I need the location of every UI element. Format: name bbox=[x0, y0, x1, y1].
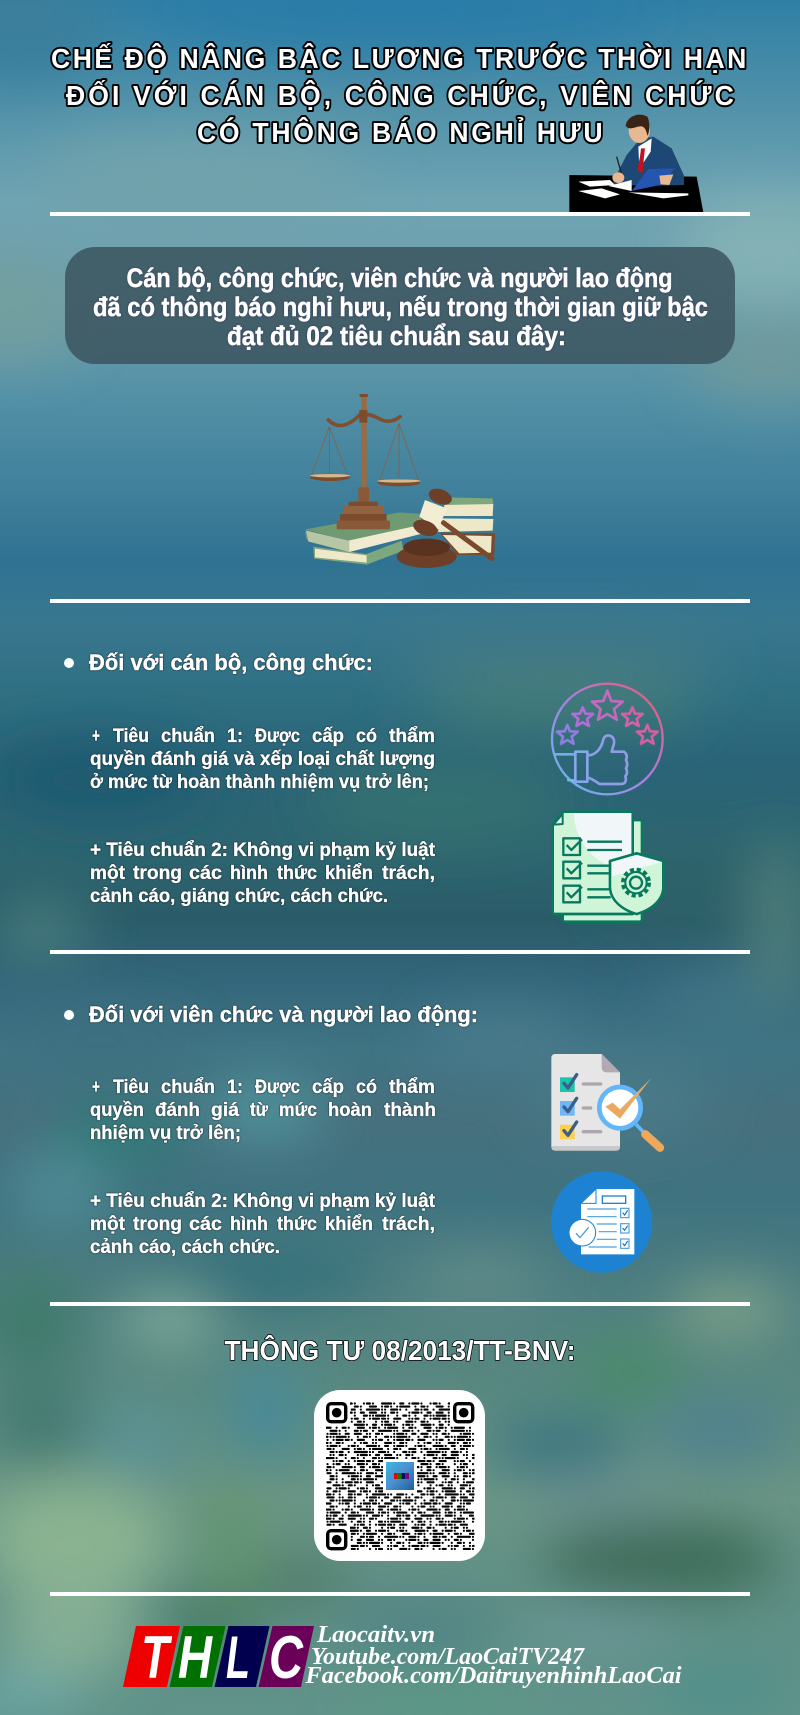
icon: checklist document with gear shield bbox=[553, 812, 663, 922]
panel: intro callout: Cán bộ, công chức, viên chức và người lao động bbox=[126, 263, 672, 293]
criterion 1 bbox=[90, 1077, 436, 1144]
title bbox=[51, 41, 746, 148]
criterion 2: cảnh cáo, giáng chức, cách chức. bbox=[90, 886, 388, 907]
divider 1 bbox=[50, 212, 750, 216]
QR finder patterns bbox=[328, 1404, 473, 1549]
icon: checklist with magnifier bbox=[551, 1054, 660, 1151]
divider 5 bbox=[50, 1592, 750, 1596]
criterion 2: trong bbox=[133, 863, 182, 884]
icon: scales of justice, gavel and books bbox=[305, 394, 495, 568]
channel links: Youtube.com/LaoCaiTV247 bbox=[311, 1644, 585, 1670]
criterion 1: 1: bbox=[227, 726, 243, 747]
logo: THLC: C bbox=[269, 1624, 304, 1691]
criterion 1: cấp bbox=[312, 726, 344, 747]
heading: Đối với cán bộ, công chức: bbox=[89, 650, 373, 675]
logo: THLC: L bbox=[226, 1624, 250, 1691]
criterion 2: cảnh cáo, cách chức. bbox=[90, 1237, 280, 1258]
criterion 2: các bbox=[189, 1214, 222, 1235]
heading: Đối với viên chức và người lao động: bbox=[89, 1002, 478, 1027]
section: officials bbox=[64, 650, 436, 907]
criterion 2 bbox=[90, 840, 436, 907]
criterion 2: hình bbox=[230, 1214, 268, 1235]
criterion 1: cấp bbox=[312, 1077, 344, 1098]
criterion 2: trách, bbox=[382, 863, 435, 884]
heading: circular reference: THÔNG TƯ 08/2013/TT-BNV: bbox=[224, 1334, 576, 1366]
criterion 1: thẩm bbox=[389, 726, 435, 747]
criterion 1: Được bbox=[255, 1077, 300, 1098]
criterion 2: + Tiêu chuẩn 2: Không vi phạm kỷ luật bbox=[90, 840, 436, 861]
logo: THLC: T bbox=[141, 1624, 172, 1691]
criterion 1: mức bbox=[279, 1100, 317, 1121]
criterion 1 bbox=[90, 726, 435, 793]
title: ĐỐI VỚI CÁN BỘ, CÔNG CHỨC, VIÊN CHỨC bbox=[66, 78, 734, 111]
criterion 1: đánh bbox=[155, 1100, 200, 1121]
criterion 2: trách, bbox=[382, 1214, 435, 1235]
section: public employees and workers bbox=[64, 1002, 478, 1258]
criterion 1: + bbox=[92, 726, 100, 747]
criterion 2: khiển bbox=[325, 863, 373, 884]
criterion 1: giá bbox=[211, 1100, 239, 1121]
logo: THLC: H bbox=[178, 1624, 213, 1691]
criterion 1: + bbox=[92, 1077, 100, 1098]
divider 2 bbox=[50, 599, 750, 603]
criterion 1: chuẩn bbox=[161, 726, 215, 747]
criterion 2: khiển bbox=[325, 1214, 373, 1235]
criterion 1: Tiêu bbox=[113, 1077, 149, 1098]
criterion 1: thẩm bbox=[389, 1077, 435, 1098]
criterion 2: thức bbox=[277, 863, 317, 884]
criterion 1: có bbox=[356, 726, 377, 747]
criterion 1: hoàn bbox=[328, 1100, 372, 1121]
criterion 2: thức bbox=[277, 1214, 317, 1235]
criterion 1: Tiêu bbox=[113, 726, 149, 747]
channel links: Facebook.com/DaitruyenhinhLaoCai bbox=[304, 1663, 682, 1689]
channel links bbox=[304, 1622, 682, 1689]
icon: blue circle with document and checkmarks bbox=[551, 1171, 652, 1273]
criterion 2: một bbox=[90, 863, 126, 884]
criterion 2 bbox=[90, 1191, 436, 1258]
criterion 1: chuẩn bbox=[161, 1077, 215, 1098]
title: CHẾ ĐỘ NÂNG BẬC LƯƠNG TRƯỚC THỜI HẠN bbox=[51, 41, 746, 74]
criterion 1: quyền bbox=[90, 1100, 144, 1121]
criterion 1: từ bbox=[250, 1100, 268, 1121]
criterion 2: trong bbox=[133, 1214, 182, 1235]
criterion 2: + Tiêu chuẩn 2: Không vi phạm kỷ luật bbox=[90, 1191, 436, 1212]
title: CÓ THÔNG BÁO NGHỈ HƯU bbox=[197, 115, 603, 148]
criterion 2: một bbox=[90, 1214, 126, 1235]
criterion 1: Được bbox=[255, 726, 300, 747]
criterion 1: nhiệm vụ trở lên; bbox=[90, 1123, 241, 1144]
criterion 2: các bbox=[189, 863, 222, 884]
criterion 1: thành bbox=[384, 1100, 436, 1121]
divider 4 bbox=[50, 1302, 750, 1306]
QR code bbox=[314, 1390, 485, 1561]
criterion 1: 1: bbox=[227, 1077, 243, 1098]
panel: intro callout: đã có thông báo nghỉ hưu, nếu trong thời gian giữ bậc bbox=[93, 292, 708, 322]
logo: THLC bbox=[123, 1624, 314, 1691]
criterion 2: hình bbox=[230, 863, 268, 884]
QR card bbox=[314, 1390, 485, 1561]
channel links: Laocaitv.vn bbox=[316, 1622, 435, 1648]
criterion 1: ở mức từ hoàn thành nhiệm vụ trở lên; bbox=[90, 772, 429, 793]
icon: man signing papers at a desk bbox=[569, 115, 703, 212]
panel: intro callout: đạt đủ 02 tiêu chuẩn sau đây: bbox=[227, 321, 566, 351]
panel: intro callout bbox=[65, 247, 735, 364]
criterion 1: quyền đánh giá và xếp loại chất lượng bbox=[90, 749, 435, 770]
bullet bbox=[64, 1010, 74, 1020]
icon: five stars and thumbs up bbox=[552, 684, 663, 794]
bullet bbox=[64, 658, 74, 668]
QR centre logo bbox=[386, 1462, 414, 1490]
criterion 1: có bbox=[356, 1077, 377, 1098]
divider 3 bbox=[50, 950, 750, 954]
